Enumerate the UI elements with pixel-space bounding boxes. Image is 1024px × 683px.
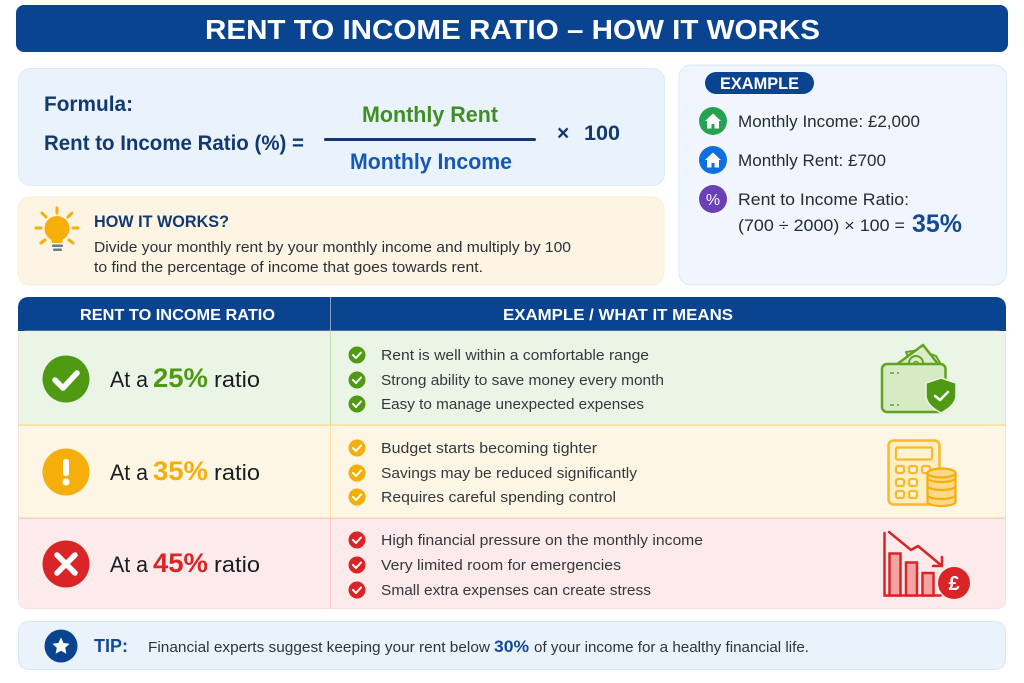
panel: example: Monthly Income: £2,000 xyxy=(738,112,920,131)
bullet list: 45%: Small extra expenses can create stress xyxy=(381,582,651,599)
icon: amber warning xyxy=(42,448,90,496)
table xyxy=(18,297,1006,609)
panel: example: Rent to Income Ratio: xyxy=(738,190,909,209)
row: 35% ratio: At a xyxy=(110,460,149,485)
row: 35% ratio: 35% xyxy=(153,456,208,486)
panel: example xyxy=(679,65,1006,285)
icon: star xyxy=(44,630,78,662)
bullet list: 45%: Very limited room for emergencies xyxy=(381,557,621,574)
row: 25% ratio: ratio xyxy=(214,367,260,392)
icon: falling chart with pound: £ xyxy=(948,573,960,595)
row: 45% ratio xyxy=(42,532,970,599)
bullet list: 35%: Budget starts becoming tighter xyxy=(381,440,597,457)
table header: RENT TO INCOME RATIO xyxy=(80,307,275,324)
icon: calculator with coins xyxy=(888,440,956,506)
tip bar xyxy=(18,622,1006,670)
bullet list: 45%: High financial pressure on the monthly income xyxy=(381,532,703,549)
row: 45% ratio: ratio xyxy=(214,552,260,577)
tip bar: TIP: xyxy=(94,636,128,656)
icon: green check xyxy=(42,356,90,402)
title banner xyxy=(16,5,1008,52)
icon: wallet with shield xyxy=(882,345,956,413)
panel: formula: Formula: xyxy=(44,93,133,116)
bullet list: 25%: Rent is well within a comfortable range xyxy=(381,347,649,364)
icon: red cross xyxy=(42,540,90,588)
panel: example: 35% xyxy=(912,210,962,238)
icon: percent xyxy=(699,185,727,213)
example badge xyxy=(705,72,814,94)
icon: percent: % xyxy=(706,192,720,209)
bullet list: 25%: Easy to manage unexpected expenses xyxy=(381,396,644,413)
panel: how it works xyxy=(18,197,664,285)
bullet list: 35% xyxy=(348,440,638,506)
bullet list: 35%: Savings may be reduced significantly xyxy=(381,465,638,482)
table header: EXAMPLE / WHAT IT MEANS xyxy=(503,307,733,324)
table header xyxy=(80,307,733,324)
example badge: EXAMPLE xyxy=(720,75,799,93)
icon: light bulb xyxy=(36,208,78,251)
bullet list: 25% xyxy=(348,346,664,413)
panel: formula: Monthly Income xyxy=(350,149,512,174)
row: 45% ratio: At a xyxy=(110,552,149,577)
row: 35% ratio: ratio xyxy=(214,460,260,485)
bullet list: 35%: Requires careful spending control xyxy=(381,489,616,506)
icon: rent house xyxy=(699,146,727,174)
icon: falling chart with pound xyxy=(884,532,970,599)
row: 45% ratio: 45% xyxy=(153,548,208,578)
bullet list: 25%: Strong ability to save money every month xyxy=(381,372,664,389)
panel: example: (700 ÷ 2000) × 100 = xyxy=(738,216,905,235)
bullet list: 45% xyxy=(348,532,703,599)
icon: income house xyxy=(699,107,727,135)
panel: how it works: HOW IT WORKS? xyxy=(94,213,229,231)
panel: formula: 100 xyxy=(584,122,620,145)
row: 25% ratio: 25% xyxy=(153,363,208,393)
panel: how it works: to find the percentage of income that goes towards rent. xyxy=(94,259,483,276)
row: 25% ratio xyxy=(42,345,956,413)
panel: how it works: Divide your monthly rent by your monthly income and multiply by 100 xyxy=(94,239,571,256)
tip bar: 30% xyxy=(494,637,529,656)
panel: formula: × xyxy=(557,122,569,145)
row: 25% ratio: At a xyxy=(110,367,149,392)
panel: example: Monthly Rent: £700 xyxy=(738,151,886,170)
row: 35% ratio xyxy=(42,440,956,506)
panel: formula: Monthly Rent xyxy=(362,102,499,127)
panel: formula: Rent to Income Ratio (%) = xyxy=(44,132,304,155)
tip bar: of your income for a healthy financial life. xyxy=(534,639,809,656)
tip bar: Financial experts suggest keeping your rent below xyxy=(148,639,490,656)
panel: formula xyxy=(18,68,664,186)
title banner: RENT TO INCOME RATIO – HOW IT WORKS xyxy=(205,14,820,45)
